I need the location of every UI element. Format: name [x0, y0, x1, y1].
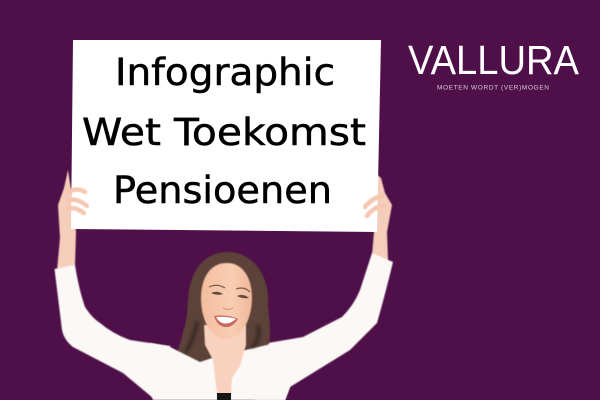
right arm: [255, 173, 393, 400]
left hand fingers over the sign: [68, 190, 87, 213]
sign heading: Wet Toekomst: [82, 111, 366, 154]
logo: [408, 37, 580, 92]
black top: [217, 393, 231, 400]
eyebrows: [209, 285, 250, 292]
eyes: [211, 292, 249, 298]
sign board: [71, 40, 381, 232]
nose: [223, 308, 233, 310]
person holding the sign: [54, 170, 393, 400]
hair back: [177, 252, 270, 363]
neck and chest: [204, 325, 246, 394]
torso and blouse: [146, 343, 300, 400]
mouth: [214, 315, 238, 327]
sign heading: Pensioenen: [113, 169, 332, 212]
sign heading: Infographic: [115, 51, 335, 94]
logo tagline: MOETEN WORDT (VER)MOGEN: [437, 84, 549, 92]
face: [201, 263, 252, 339]
hair shadow strands: [186, 322, 259, 352]
left arm: [54, 170, 175, 398]
right hand fingers over the sign: [365, 196, 384, 216]
logo wordmark: VALLURA: [408, 37, 580, 83]
sign heading: [82, 51, 366, 212]
